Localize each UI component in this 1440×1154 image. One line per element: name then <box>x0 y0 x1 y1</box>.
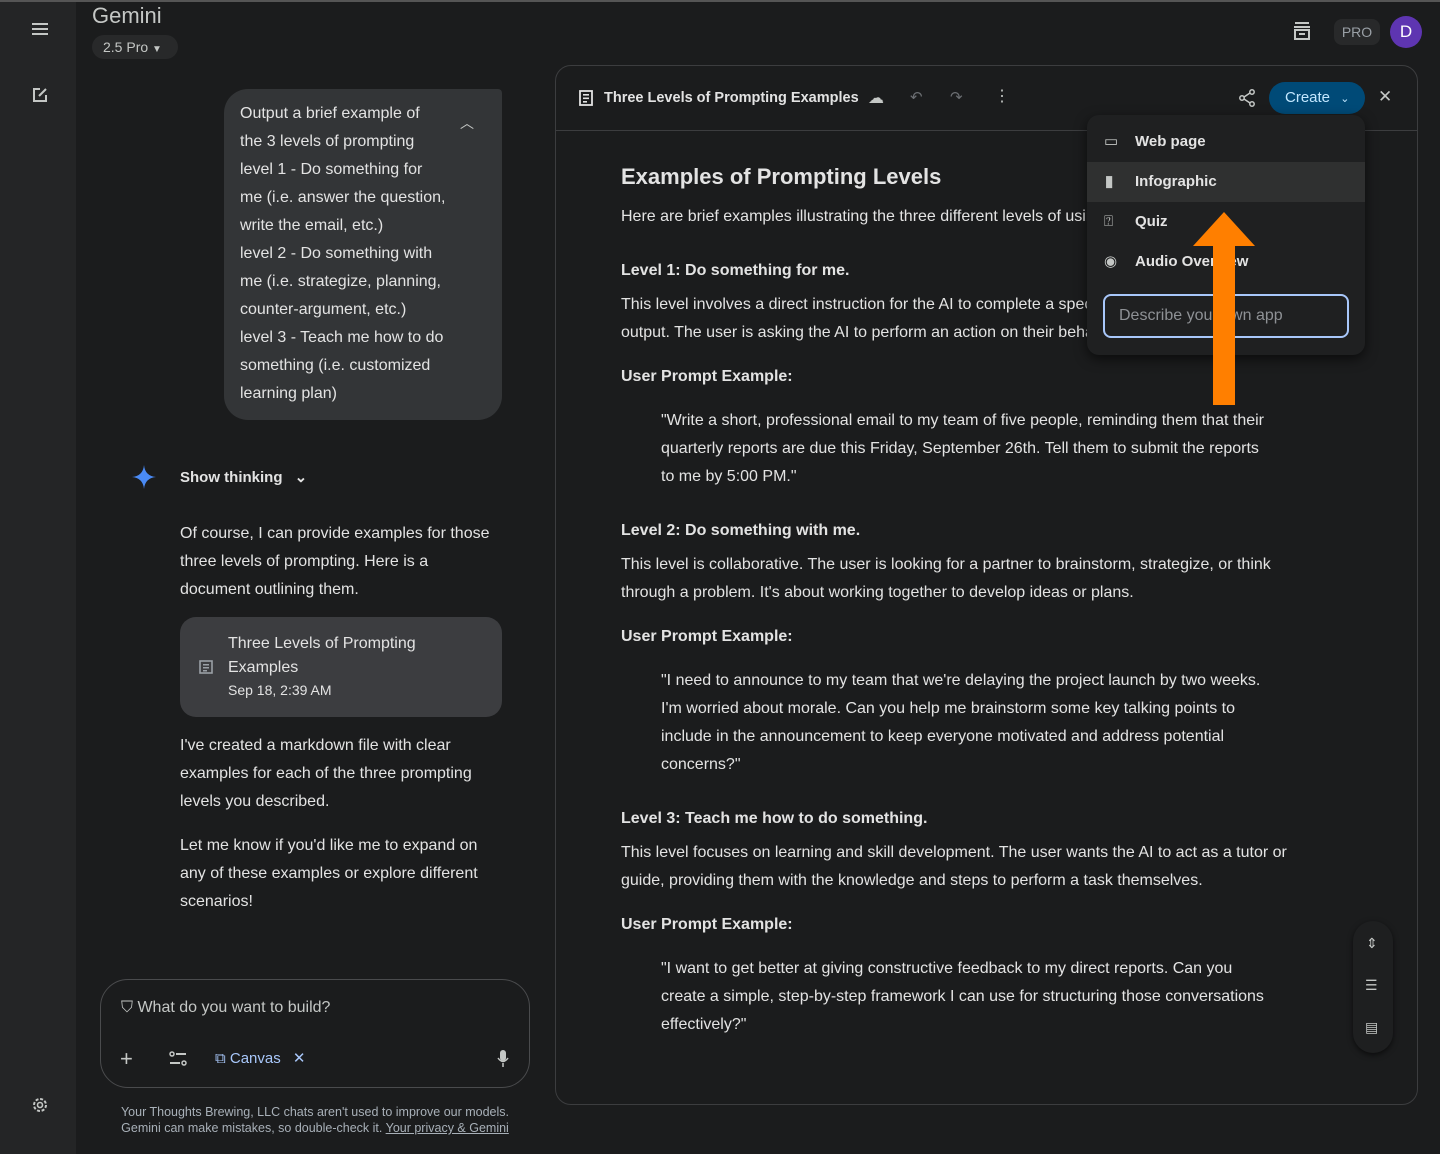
footer disclaimer <box>121 1105 509 1135</box>
avatar: D <box>1400 22 1412 41</box>
describe input <box>1103 294 1349 338</box>
floating toolbar <box>1353 921 1393 1053</box>
canvas header: ☁ <box>868 90 884 107</box>
user prompt bubble <box>224 89 502 420</box>
avatar <box>1390 16 1422 48</box>
canvas header: ↶ <box>910 89 923 106</box>
canvas header: ⋮ <box>994 88 1010 105</box>
user prompt bubble: the 3 levels of prompting <box>240 133 414 150</box>
panel: canvas document: User Prompt Example: <box>621 916 793 933</box>
icon: menu <box>32 23 48 35</box>
create button <box>1269 82 1365 114</box>
arrow: orange pointer to Infographic <box>1193 212 1255 405</box>
document card: Three Levels of Prompting <box>228 635 416 652</box>
panel: canvas document: guide, providing them with the knowledge and steps to perform a task themselves. <box>621 872 1203 889</box>
title: Gemini: Gemini <box>92 3 162 28</box>
user prompt bubble: something (i.e. customized <box>240 357 430 374</box>
panel: canvas document: include in the announcement to keep everyone motivated and address potential <box>661 728 1224 745</box>
badge: PRO <box>1334 19 1380 45</box>
menu item: web page: Web page <box>1135 133 1206 150</box>
menu item: audio overview: ◉ <box>1104 253 1117 270</box>
canvas chip: ⧉ Canvas ✕ <box>215 1050 305 1067</box>
response text 2: examples for each of the three prompting <box>180 765 472 782</box>
user prompt bubble: level 3 - Teach me how to do <box>240 329 443 346</box>
floating toolbar: ☰ <box>1365 977 1378 993</box>
icon: settings <box>33 1098 47 1112</box>
show thinking <box>132 465 307 489</box>
panel: canvas document: "I want to get better at giving constructive feedback to my direct reports. Can you <box>661 960 1232 977</box>
user prompt bubble: level 1 - Do something for <box>240 161 422 178</box>
icon: doc <box>199 660 213 674</box>
footer disclaimer: Gemini can make mistakes, so double-check it. Your privacy & Gemini <box>121 1121 509 1135</box>
canvas header: ↷ <box>950 89 963 106</box>
panel: canvas document: quarterly reports are due this Friday, September 26th. Tell them to submit the reports <box>661 440 1259 457</box>
user prompt bubble: level 2 - Do something with <box>240 245 432 262</box>
panel: canvas document: This level focuses on learning and skill development. The user wants the AI to act as a tutor or <box>621 844 1287 861</box>
panel: canvas document: "I need to announce to my team that we're delaying the project launch by two weeks. <box>661 672 1260 689</box>
icon: tools <box>169 1051 187 1066</box>
panel: canvas document: to me by 5:00 PM." <box>661 468 797 485</box>
menu item: infographic (highlighted): ▮ <box>1105 173 1113 190</box>
create dropdown menu <box>1087 115 1365 355</box>
input box: + <box>120 1046 133 1071</box>
panel: canvas document: I'm worried about morale. Can you help me brainstorm some key talking points to <box>661 700 1235 717</box>
response text 2: levels you described. <box>180 793 329 810</box>
icon: mic <box>498 1050 508 1067</box>
menu item: web page <box>1104 133 1206 150</box>
top right controls <box>1294 16 1422 48</box>
model selector: 2.5 Pro ▼ <box>103 39 162 55</box>
user prompt bubble: write the email, etc.) <box>240 217 383 234</box>
panel: canvas document: Level 2: Do something with me. <box>621 522 860 539</box>
input box <box>100 979 530 1088</box>
icon: collapse: ︿ <box>460 115 474 131</box>
response text <box>180 525 489 598</box>
document body: Examples of Prompting Levels <box>621 164 941 189</box>
panel: canvas document: through a problem. It's about working together to develop ideas or plans. <box>621 584 1134 601</box>
response text 2 <box>180 737 472 810</box>
canvas header: ✕ <box>1378 87 1392 106</box>
show thinking: Show thinking ⌄ <box>180 469 307 486</box>
document card: Sep 18, 2:39 AM <box>228 682 332 698</box>
input box: ⛉ What do you want to build? <box>121 999 330 1016</box>
model selector <box>92 35 178 59</box>
top border line <box>0 0 1440 2</box>
panel: canvas document: effectively?" <box>661 1016 746 1033</box>
floating toolbar: ⇕ <box>1366 935 1378 951</box>
floating toolbar: ▤ <box>1365 1019 1378 1035</box>
response text: three levels of prompting. Here is a <box>180 553 428 570</box>
panel: canvas document: create a simple, step-by-step framework I can use for structuring those conversations <box>661 988 1264 1005</box>
panel: canvas document: "Write a short, professional email to my team of five people, reminding them that their <box>661 412 1264 429</box>
menu item: infographic (highlighted) <box>1087 162 1365 202</box>
canvas header: Three Levels of Prompting Examples <box>604 90 859 106</box>
panel: canvas document: output. The user is asking the AI to perform an action on their behalf. <box>621 324 1106 341</box>
describe input: Describe your own app <box>1119 307 1283 324</box>
panel: canvas document: User Prompt Example: <box>621 628 793 645</box>
panel: canvas document: Level 3: Teach me how to do something. <box>621 810 927 827</box>
canvas header <box>556 66 1419 131</box>
user prompt bubble: learning plan) <box>240 385 337 402</box>
menu item: infographic (highlighted): Infographic <box>1135 173 1217 190</box>
response text 2: I've created a markdown file with clear <box>180 737 451 754</box>
icon: share <box>1239 89 1255 107</box>
response text 3: any of these examples or explore different <box>180 865 478 882</box>
panel: canvas document: Level 1: Do something for me. <box>621 262 849 279</box>
response text: Of course, I can provide examples for those <box>180 525 489 542</box>
user prompt bubble: me (i.e. answer the question, <box>240 189 445 206</box>
response text 3 <box>180 837 478 910</box>
menu item: web page: ▭ <box>1104 133 1118 150</box>
footer disclaimer: Your Thoughts Brewing, LLC chats aren't used to improve our models. <box>121 1105 509 1119</box>
badge: PRO: PRO <box>1342 24 1372 40</box>
panel: canvas document: User Prompt Example: <box>621 368 793 385</box>
response text: document outlining them. <box>180 581 359 598</box>
panel: canvas document: concerns?" <box>661 756 740 773</box>
response text 3: Let me know if you'd like me to expand on <box>180 837 477 854</box>
panel: canvas document: This level is collaborative. The user is looking for a partner to brainstorm, strategize, or think <box>621 556 1271 573</box>
create button: Create ⌄ <box>1285 89 1349 106</box>
menu item: quiz: Quiz <box>1135 213 1168 230</box>
panel: canvas document <box>555 65 1418 1105</box>
panel: canvas document: This level involves a direct instruction for the AI to complete a specific task or generate a specific <box>621 296 1303 313</box>
user prompt bubble: me (i.e. strategize, planning, <box>240 273 441 290</box>
icon: new chat <box>33 88 47 102</box>
sidebar <box>0 2 76 1154</box>
user prompt bubble: counter-argument, etc.) <box>240 301 406 318</box>
panel: canvas document: Here are brief examples illustrating the three different levels of using AI prompting. <box>621 208 1202 225</box>
menu item: quiz: ⍰ <box>1104 213 1113 230</box>
user prompt bubble: Output a brief example of <box>240 105 420 122</box>
document card <box>180 617 502 717</box>
menu item: audio overview: Audio Overview <box>1135 253 1248 270</box>
response text 3: scenarios! <box>180 893 253 910</box>
menu item: quiz <box>1104 213 1168 230</box>
document card: Examples <box>228 659 298 676</box>
icon: archive <box>1294 22 1310 40</box>
icon: gemini sparkle <box>132 465 156 489</box>
